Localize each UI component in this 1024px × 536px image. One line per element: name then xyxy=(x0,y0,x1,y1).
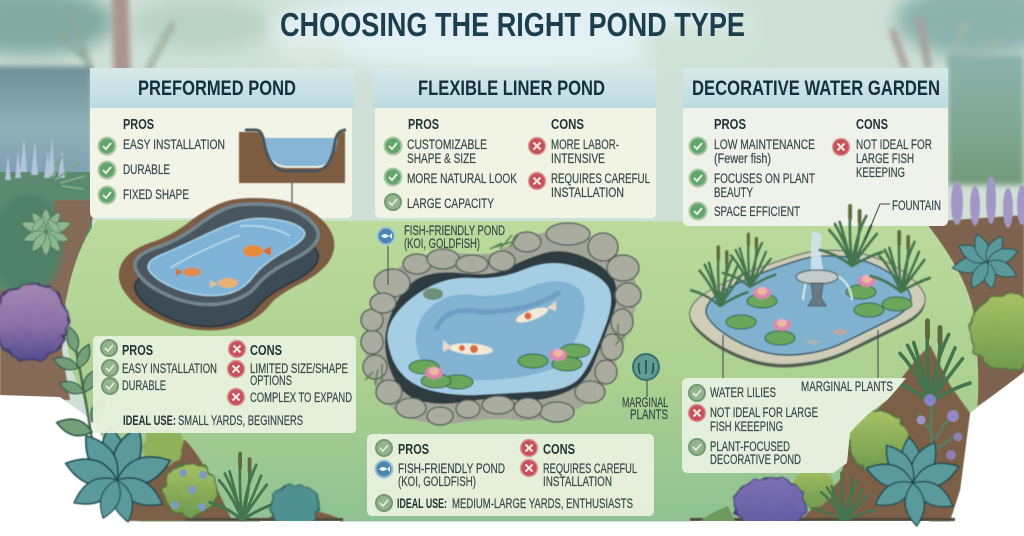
decorative summary card: FISH KEEEPING xyxy=(710,419,783,434)
fern clump xyxy=(19,208,73,256)
flower stalk xyxy=(916,394,962,460)
flexible summary card: INSTALLATION xyxy=(543,474,612,489)
preformed header: PREFORMED POND xyxy=(138,77,296,100)
goldfish xyxy=(176,245,271,288)
agave right xyxy=(863,436,962,527)
callout: fish-friendly: (KOI, GOLDFISH) xyxy=(404,236,480,251)
callout: fish-friendly: FISH-FRIENDLY POND xyxy=(404,223,505,238)
preformed summary card: EASY INSTALLATION xyxy=(122,361,217,376)
agave xyxy=(62,423,175,524)
flexible summary card: IDEAL USE: xyxy=(397,496,447,511)
leafy stem xyxy=(52,325,108,440)
flexible summary card xyxy=(367,434,654,516)
flexible pros and cons card: CUSTOMIZABLE xyxy=(407,137,487,152)
purple shrub xyxy=(0,284,68,360)
teal shrub xyxy=(271,484,319,532)
flexible summary card: (KOI, GOLDFISH) xyxy=(398,474,476,489)
white cut-outs at corners and bottom xyxy=(0,372,1024,536)
callout: marginal plants: PLANTS xyxy=(630,407,668,422)
preformed summary card: SMALL YARDS, BEGINNERS xyxy=(178,413,303,428)
green shrub with blue flowers xyxy=(143,427,216,516)
panel: decorative water garden xyxy=(682,68,948,473)
flexible pros and cons card: PROS xyxy=(408,117,439,133)
panel: flexible liner pond xyxy=(361,68,668,516)
decorative summary card: MARGINAL PLANTS xyxy=(801,379,893,394)
preformed pros card xyxy=(90,108,352,218)
title: CHOOSING THE RIGHT POND TYPE xyxy=(280,6,745,43)
decorative pros and cons card xyxy=(683,108,948,226)
preformed pros card: PROS xyxy=(123,117,154,133)
callout: marginal plants: MARGINAL xyxy=(622,395,668,410)
left foliage xyxy=(0,66,100,400)
preformed summary card: CONS xyxy=(250,343,282,359)
decorative pros and cons card: NOT IDEAL FOR xyxy=(856,137,932,152)
rocks xyxy=(361,223,641,425)
flexible pros and cons card: INSTALLATION xyxy=(551,185,624,200)
decorative pros and cons card: (Fewer fish) xyxy=(714,151,771,166)
decorative pros and cons card: PROS xyxy=(714,117,746,133)
preformed summary card xyxy=(93,336,356,433)
decorative summary card: NOT IDEAL FOR LARGE xyxy=(710,405,818,420)
decorative summary card: PLANT-FOCUSED xyxy=(710,439,790,454)
decorative summary card: WATER LILIES xyxy=(710,385,776,400)
decorative summary card: DECORATIVE POND xyxy=(710,452,801,467)
preformed summary card: IDEAL USE: xyxy=(123,413,176,428)
hosta xyxy=(951,232,1020,291)
preformed pros card: FIXED SHAPE xyxy=(123,187,189,202)
marginal plants xyxy=(691,247,747,306)
low bushes xyxy=(734,467,833,530)
flexible header: FLEXIBLE LINER POND xyxy=(418,77,605,100)
flexible pros and cons card: CONS xyxy=(551,117,584,133)
preformed summary card: COMPLEX TO EXPAND xyxy=(250,390,352,405)
decorative pros and cons card: KEEEPING xyxy=(856,165,905,180)
preformed pros card: EASY INSTALLATION xyxy=(123,137,225,152)
decorative pros and cons card: CONS xyxy=(856,117,888,133)
flexible pros and cons card: INTENSIVE xyxy=(551,151,605,166)
decorative header: DECORATIVE WATER GARDEN xyxy=(692,77,940,100)
flexible pond illustration xyxy=(361,223,641,425)
flexible pros and cons card xyxy=(375,108,656,218)
preformed summary card: OPTIONS xyxy=(250,373,292,388)
preformed summary card: LIMITED SIZE/SHAPE xyxy=(250,361,348,376)
flexible pros and cons card: SHAPE & SIZE xyxy=(407,151,476,166)
flexible header xyxy=(373,68,656,108)
decorative pros and cons card: FOCUSES ON PLANT xyxy=(714,171,815,186)
koi xyxy=(443,301,556,356)
flexible summary card: FISH-FRIENDLY POND xyxy=(398,461,505,476)
right foliage xyxy=(925,55,1024,410)
flexible summary card: PROS xyxy=(398,442,429,458)
preformed pros card: DURABLE xyxy=(123,162,170,177)
preformed header xyxy=(90,68,355,108)
callout: marginal plants xyxy=(622,354,668,422)
cross-section diagram xyxy=(239,130,346,206)
callout: fountain xyxy=(865,198,941,240)
left shrubs and plants xyxy=(0,284,340,536)
flexible summary card: MEDIUM-LARGE YARDS, ENTHUSIASTS xyxy=(452,496,633,511)
decorative pros and cons card: SPACE EFFICIENT xyxy=(714,204,800,219)
flexible pros and cons card: REQUIRES CAREFUL xyxy=(551,171,650,186)
lily pads xyxy=(409,288,590,389)
round shrub right xyxy=(970,294,1024,370)
ground: lawn xyxy=(66,220,978,521)
reeds xyxy=(210,454,272,520)
preformed summary card: PROS xyxy=(122,343,153,359)
small grasses xyxy=(365,235,625,385)
decorative summary card xyxy=(682,330,906,473)
panel: preformed pond xyxy=(90,68,356,433)
round shrub centre xyxy=(848,411,908,471)
flexible summary card: CONS xyxy=(543,442,575,458)
preformed summary card: DURABLE xyxy=(122,378,166,393)
flexible pros and cons card: MORE NATURAL LOOK xyxy=(407,171,517,186)
right shrubs and plants xyxy=(690,232,1024,536)
earth borders xyxy=(125,345,970,521)
decorative pros and cons card: BEAUTY xyxy=(714,185,753,200)
water lilies xyxy=(726,275,912,345)
fern xyxy=(812,473,874,521)
decorative pros and cons card: LARGE FISH xyxy=(856,151,914,166)
spiky plant xyxy=(888,321,970,402)
flexible pros and cons card: MORE LABOR- xyxy=(551,137,619,152)
fountain xyxy=(796,232,852,306)
decorative pros and cons card: LOW MAINTENANCE xyxy=(714,137,815,152)
callout: fountain: FOUNTAIN xyxy=(892,198,941,213)
decorative header xyxy=(683,68,948,108)
flexible summary card: REQUIRES CAREFUL xyxy=(543,461,637,476)
callout: fish-friendly xyxy=(378,223,505,285)
preformed pond illustration xyxy=(135,204,318,326)
flexible pros and cons card: LARGE CAPACITY xyxy=(407,196,494,211)
water garden illustration xyxy=(690,206,930,367)
